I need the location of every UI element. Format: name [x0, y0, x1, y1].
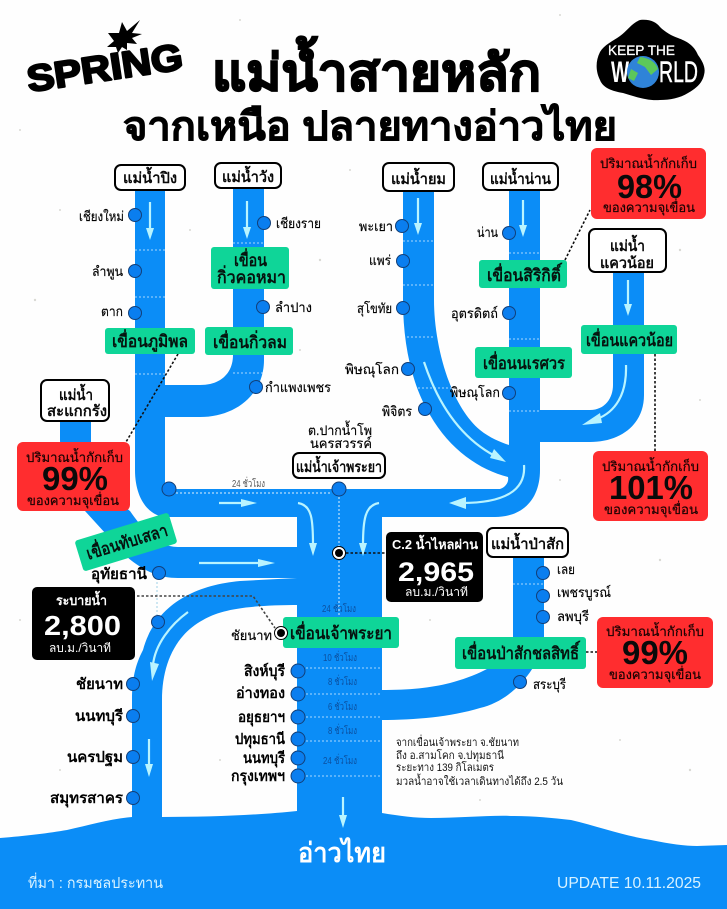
river: Sakae Krang and Uthai channel — [60, 420, 300, 578]
callout: 101 percent — [593, 451, 708, 521]
travel time labels: 24 ชั่วโมง — [322, 601, 356, 615]
river name: Pa Sak: แม่น้ำป่าสัก — [491, 532, 564, 553]
province labels: ปทุมธานี — [235, 731, 286, 749]
update date: UPDATE 10.11.2025 — [557, 875, 701, 892]
river name: Yom: แม่น้ำยม — [391, 167, 446, 188]
callout: 99 percent right — [597, 617, 713, 688]
province labels: กรุงเทพฯ — [231, 768, 285, 786]
callout: discharge 2,800: 2,800 — [44, 610, 121, 641]
note: travel distance: ระยะทาง 139 กิโลเมตร — [396, 760, 494, 774]
travel time labels: 24 ชั่วโมง — [232, 476, 265, 490]
logo: Spring: SPRING — [24, 36, 185, 100]
callout: 99 percent left: ปริมาณน้ำกักเก็บ — [26, 448, 123, 465]
travel time labels: 8 ชั่วโมง — [328, 723, 357, 737]
province labels: ลำปาง — [275, 300, 312, 315]
dam: Kiew Lom: เขื่อนกิ่วลม — [213, 330, 287, 352]
river: Wang — [160, 188, 264, 417]
logo: Keep the World: KEEP THE — [608, 42, 675, 58]
travel time labels: 8 ชั่วโมง — [328, 674, 357, 688]
province labels: เพชรบูรณ์ — [557, 584, 611, 601]
dam: Sirikit — [479, 260, 567, 288]
logo: Spring — [24, 20, 185, 100]
callout: 99 percent left — [17, 442, 130, 511]
province labels: ตาก — [101, 304, 123, 319]
dam: Naresuan: เขื่อนนเรศวร — [483, 351, 566, 373]
dam: Pa Sak Jolasid: เขื่อนป่าสักชลสิทธิ์ — [462, 640, 581, 663]
river: Yom — [403, 188, 512, 490]
callout: discharge 2,800: ระบายน้ำ — [56, 590, 107, 608]
province labels: เชียงใหม่ — [79, 208, 124, 224]
river name: Kwae Noi: แควน้อย — [600, 255, 654, 272]
river: Nan with junction channel — [380, 188, 540, 517]
title line two: จากเหนือ ปลายทางอ่าวไทย — [123, 103, 617, 149]
province labels: อยุธยาฯ — [238, 709, 285, 727]
river: Chao Phraya central channel — [297, 489, 382, 815]
river name: Ping — [115, 165, 185, 190]
logo: Keep the World: RLD — [659, 56, 698, 89]
travel time labels: 10 ชั่วโมง — [323, 650, 357, 664]
measuring point C.2 marker — [332, 546, 346, 560]
province labels: เลย — [557, 562, 575, 577]
river name: Sakae Krang: แม่น้ำ — [59, 383, 93, 404]
dotted time lines — [135, 241, 544, 776]
callout: C.2 flow 2,965: C.2 น้ำไหลผ่าน — [392, 534, 478, 552]
province labels: นครสวรรค์ — [310, 435, 372, 451]
river name: Sakae Krang: สะแกกรัง — [47, 403, 107, 420]
leader lines — [126, 210, 655, 652]
callout: 98 percent: ปริมาณน้ำกักเก็บ — [600, 154, 697, 171]
river: Kwae Noi — [535, 270, 644, 442]
logo: Keep the World: W — [611, 56, 629, 89]
sea label: อ่าวไทย — [298, 837, 386, 868]
travel time labels: 6 ชั่วโมง — [328, 699, 357, 713]
callout: 99 percent left: 99% — [42, 460, 108, 497]
river name: Ping: แม่น้ำปิง — [123, 166, 177, 187]
travel time labels — [232, 476, 357, 767]
dam: Kiew Lom — [205, 327, 293, 355]
dam: Kwae Noi: เขื่อนแควน้อย — [586, 328, 673, 350]
sea: Gulf of Thailand — [0, 811, 727, 909]
callout: 101 percent: ปริมาณน้ำกักเก็บ — [602, 457, 699, 474]
province labels: เชียงราย — [276, 216, 321, 231]
province labels: พิษณุโลก — [450, 384, 500, 401]
callout: 101 percent: 101% — [609, 469, 693, 506]
river name: Kwae Noi — [589, 229, 666, 272]
river name: Sakae Krang — [41, 380, 109, 421]
province labels: สุโขทัย — [357, 300, 392, 317]
province labels: แพร่ — [369, 253, 391, 268]
dam: Kiew Kho Ma — [211, 247, 289, 289]
dam: Chao Phraya — [283, 617, 399, 648]
Chao Phraya dam marker — [274, 626, 288, 640]
province labels: ลำพูน — [92, 264, 123, 280]
province labels: กำแพงเพชร — [265, 380, 331, 395]
river name: Chao Phraya — [293, 453, 385, 478]
province labels — [50, 208, 611, 808]
river name: Pa Sak — [487, 528, 568, 557]
dam: Naresuan — [475, 347, 572, 378]
note: travel distance: มวลน้ำอาจใช้เวลาเดินทางได้ถึง 2.5 วัน — [396, 773, 563, 788]
province labels: ชัยนาท — [231, 628, 272, 643]
river name: Kwae Noi: แม่น้ำ — [610, 234, 645, 255]
province labels: อุตรดิตถ์ — [451, 305, 498, 322]
province labels: พะเยา — [359, 219, 393, 234]
dam: Kiew Kho Ma: เขื่อน — [234, 248, 267, 270]
province labels: อ่างทอง — [236, 685, 285, 702]
dam: Pa Sak Jolasid — [455, 637, 586, 669]
callout: C.2 flow 2,965: 2,965 — [398, 557, 474, 587]
station nodes — [126, 208, 550, 804]
dam: Thap Salao — [74, 512, 178, 572]
province labels: นนทบุรี — [75, 708, 124, 726]
province labels: อุทัยธานี — [91, 566, 148, 584]
title line one: แม่น้ำสายหลัก — [212, 36, 541, 101]
province labels: น่าน — [477, 225, 498, 240]
province labels: ต.ปากน้ำโพ — [308, 420, 372, 438]
logo: Keep the World — [597, 20, 705, 100]
callout: 101 percent: ของความจุเขื่อน — [604, 501, 698, 518]
dam: Sirikit: เขื่อนสิริกิติ์ — [487, 262, 563, 285]
river: Pa Sak — [380, 555, 544, 720]
source: ที่มา : กรมชลประทาน — [28, 872, 163, 892]
flow arrows — [145, 198, 632, 828]
dam: Bhumibol: เขื่อนภูมิพล — [112, 329, 188, 353]
callout: 98 percent: 98% — [617, 168, 682, 205]
callout: 98 percent — [591, 148, 706, 219]
river name: Nan — [483, 163, 558, 190]
river name: Nan: แม่น้ำน่าน — [490, 167, 552, 188]
river name: Wang — [215, 163, 281, 188]
callout: C.2 flow 2,965: ลบ.ม./วินาที — [405, 585, 468, 599]
dam: Kwae Noi — [581, 325, 677, 354]
callout: 99 percent left: ของความจุเขื่อน — [27, 492, 119, 509]
callout: C.2 flow 2,965 — [386, 532, 483, 602]
callout: 99 percent right: ปริมาณน้ำกักเก็บ — [606, 622, 704, 639]
province labels: ชัยนาท — [76, 676, 123, 693]
note: travel distance — [396, 734, 563, 788]
province labels: สระบุรี — [533, 677, 566, 693]
province labels: นครปฐม — [67, 749, 123, 767]
river: Ping with main channel — [135, 188, 300, 517]
river name: Yom — [383, 163, 454, 191]
river name: Wang: แม่น้ำวัง — [222, 165, 274, 186]
province labels: นนทบุรี — [243, 750, 286, 768]
note: travel distance: จากเขื่อนเจ้าพระยา จ.ชัยนาท — [396, 734, 519, 749]
travel time labels: 24 ชั่วโมง — [323, 753, 357, 767]
callout: 99 percent right: 99% — [622, 634, 688, 671]
province labels: พิษณุโลก — [345, 361, 399, 378]
dam: Kiew Kho Ma: กิ่วคอหมา — [217, 265, 286, 287]
callout: discharge 2,800 — [32, 587, 135, 660]
river: Tha Chin — [132, 578, 300, 820]
province labels: ลพบุรี — [557, 609, 589, 625]
callout: 98 percent: ของความจุเขื่อน — [603, 199, 695, 216]
province labels: พิจิตร — [382, 404, 412, 419]
note: travel distance: ถึง อ.สามโคก จ.ปทุมธานี — [396, 748, 504, 762]
callout: 99 percent right: ของความจุเขื่อน — [609, 666, 701, 683]
province labels: สมุทรสาคร — [50, 790, 124, 808]
province labels: สิงห์บุรี — [244, 662, 286, 681]
dam: Chao Phraya: เขื่อนเจ้าพระยา — [290, 621, 392, 643]
dam: Thap Salao: เขื่อนทับเสลา — [83, 518, 170, 564]
river name: Chao Phraya: แม่น้ำเจ้าพระยา — [296, 455, 382, 476]
dam: Bhumibol — [105, 328, 195, 354]
callout: discharge 2,800: ลบ.ม./วินาที — [49, 641, 111, 655]
